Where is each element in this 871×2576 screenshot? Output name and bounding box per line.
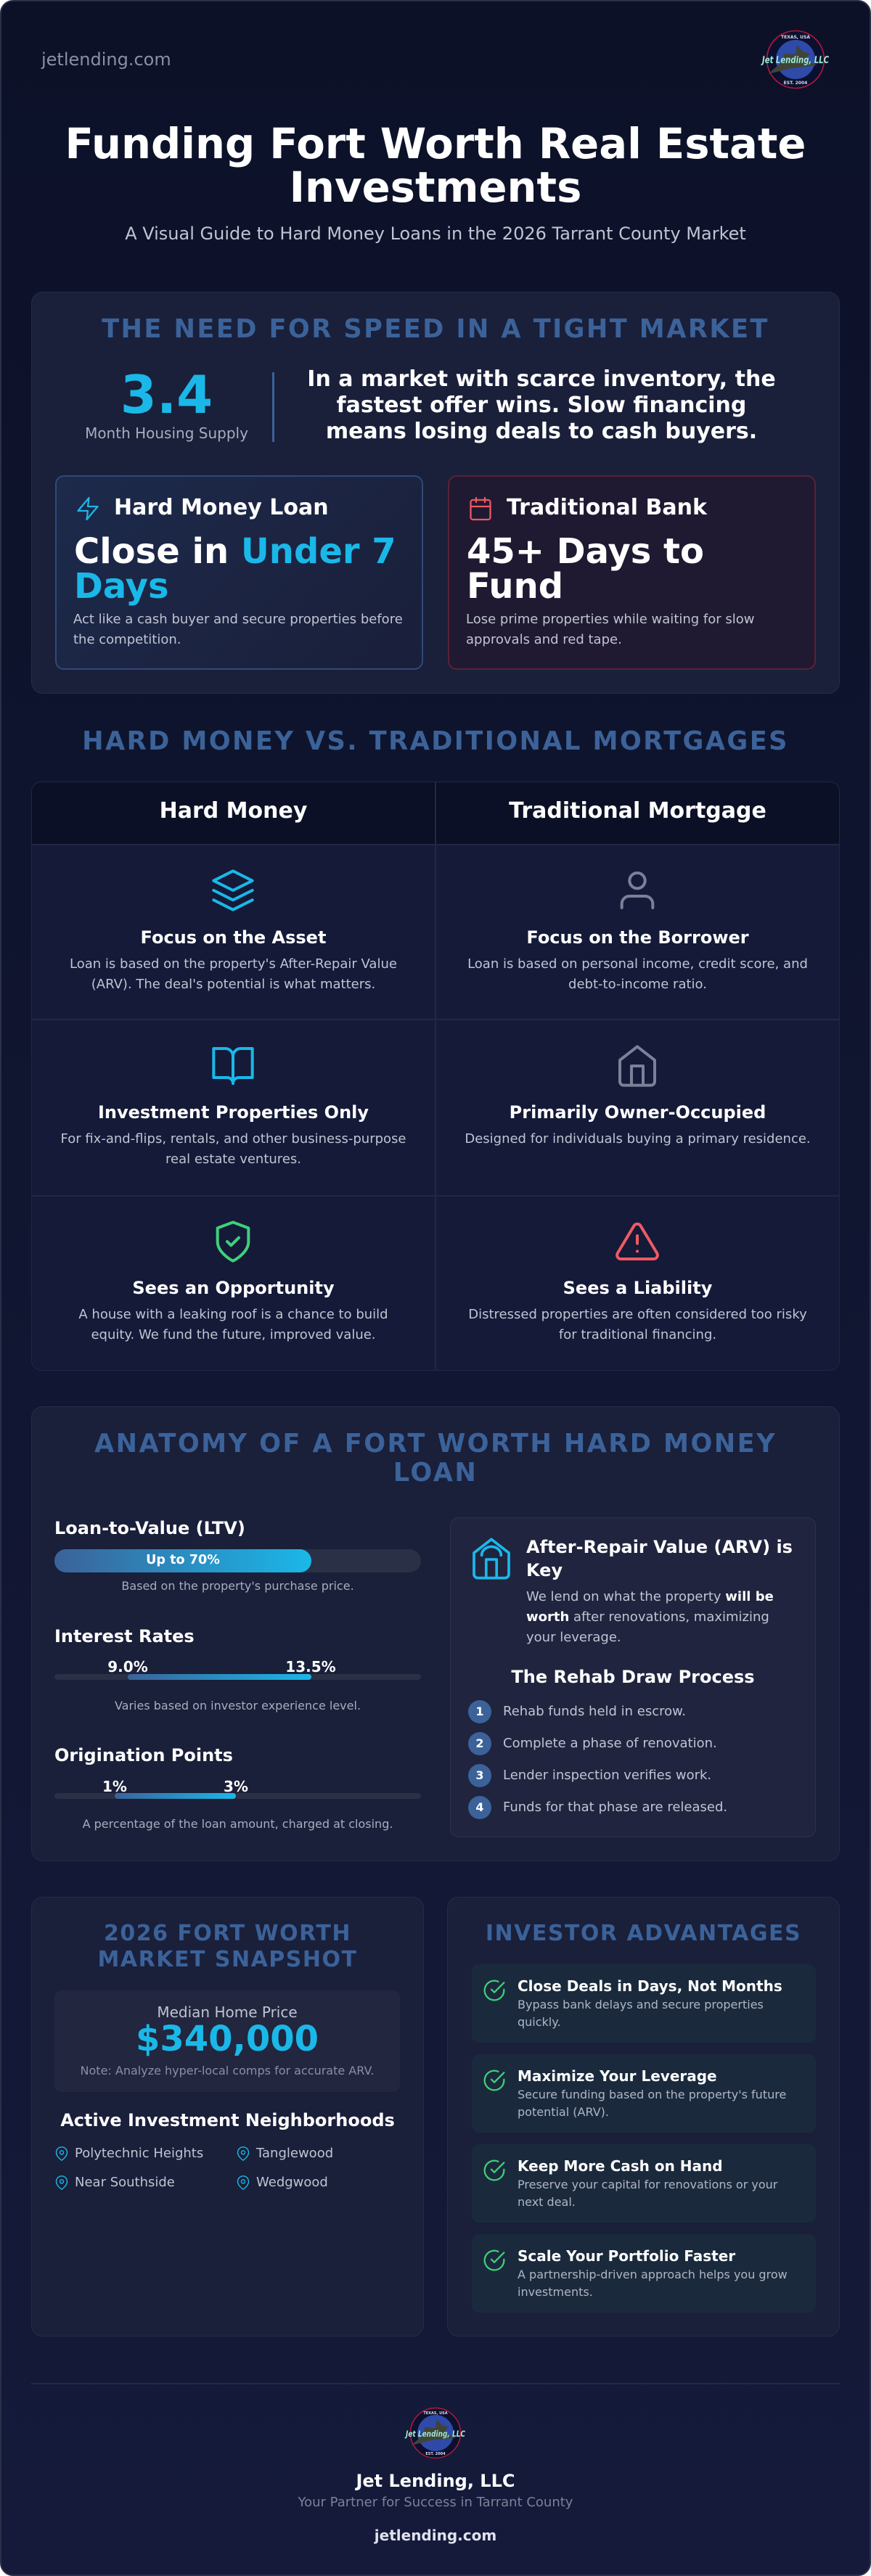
cell: focus on the asset: Focus on the Asset xyxy=(141,927,326,948)
site url: jetlending.com xyxy=(41,49,171,70)
step 4 xyxy=(468,1796,727,1819)
step 4: 4 xyxy=(475,1800,484,1814)
card value: close in under 7 days xyxy=(74,531,396,607)
metric: origination points: Origination Points xyxy=(54,1745,233,1765)
panel: need for speed xyxy=(31,292,840,694)
stat: median home price: $340,000 xyxy=(136,2019,319,2059)
metric: interest rates xyxy=(54,1626,421,1712)
card description: Act like a cash buyer and secure properties before xyxy=(73,612,403,627)
ARV description: worth after renovations, maximizing xyxy=(526,1609,769,1625)
logo: Jet Lending badge: TEXAS, USA xyxy=(781,35,810,40)
step 3 xyxy=(468,1764,711,1787)
card: traditional bank xyxy=(448,475,816,670)
ARV description: your leverage. xyxy=(526,1630,621,1645)
step 4: Funds for that phase are released. xyxy=(503,1800,727,1815)
icon: calendar xyxy=(470,496,491,521)
cell: sees an opportunity: Sees an Opportunity xyxy=(132,1278,335,1298)
comparison table xyxy=(31,782,840,1371)
cell: investment properties only: real estate ventures. xyxy=(165,1152,301,1167)
logo: Jet Lending badge xyxy=(761,30,829,89)
advantage 4 xyxy=(472,2234,816,2313)
metric: loan-to-value xyxy=(54,1518,421,1593)
neighborhood: Polytechnic Heights: Polytechnic Heights xyxy=(75,2146,203,2161)
cell: primarily owner-occupied: Primarily Owner-Occupied xyxy=(510,1102,766,1123)
stat: housing supply: Month Housing Supply xyxy=(85,424,248,442)
stat: median home price: Note: Analyze hyper-local comps for accurate ARV. xyxy=(81,2064,374,2077)
cell: sees a liability: Sees a Liability xyxy=(563,1278,712,1298)
icon: lightning bolt xyxy=(77,496,99,521)
step 2: 2 xyxy=(475,1736,484,1750)
cell: focus on the borrower: Focus on the Borrower xyxy=(526,927,749,948)
stat: housing supply xyxy=(85,364,248,442)
icon: house xyxy=(618,1045,656,1087)
step 2: Complete a phase of renovation. xyxy=(503,1736,717,1751)
ARV title: After-Repair Value (ARV) is xyxy=(526,1537,793,1557)
title xyxy=(65,120,806,212)
icon: open book xyxy=(212,1047,254,1085)
statement: In a market with scarce inventory, the xyxy=(307,366,776,392)
stat: median home price xyxy=(54,1990,400,2092)
cell: investment properties only xyxy=(60,1047,406,1167)
metric: origination points: 1% xyxy=(102,1778,127,1795)
card description xyxy=(466,612,755,647)
rehab draw heading: The Rehab Draw Process xyxy=(511,1667,755,1687)
step 2 xyxy=(468,1732,717,1755)
advantage 4: Scale Your Portfolio Faster xyxy=(518,2247,735,2265)
cell: sees an opportunity: A house with a leaking roof is a chance to build xyxy=(78,1307,388,1322)
cell: focus on the borrower: debt-to-income ratio. xyxy=(568,977,707,992)
footer logo xyxy=(404,2408,465,2458)
advantage 3: next deal. xyxy=(518,2195,576,2209)
icon: warning triangle xyxy=(616,1222,659,1260)
metric: interest rates: 9.0% xyxy=(107,1658,148,1675)
icon: ARV house xyxy=(473,1538,510,1579)
metric: loan-to-value: Based on the property's purchase price. xyxy=(121,1579,354,1593)
footer url: jetlending.com xyxy=(375,2527,496,2544)
card value: 45+ days to fund: Fund xyxy=(467,566,563,607)
card title: traditional bank: Traditional Bank xyxy=(507,495,707,520)
metric: interest rates: 13.5% xyxy=(285,1658,336,1675)
cell: focus on the asset: Loan is based on the property's After-Repair Value xyxy=(70,956,397,972)
title: Investments xyxy=(290,163,581,212)
icon: user xyxy=(620,871,655,909)
ARV title xyxy=(526,1537,793,1580)
advantage 2 xyxy=(472,2054,816,2133)
ARV title: Key xyxy=(526,1560,563,1580)
neighborhood: Tanglewood: Tanglewood xyxy=(256,2146,333,2161)
advantage 3: Keep More Cash on Hand xyxy=(518,2157,723,2175)
card description: Lose prime properties while waiting for slow xyxy=(466,612,755,627)
neighborhood: Wedgwood: Wedgwood xyxy=(256,2175,328,2190)
metric: loan-to-value: Up to 70% xyxy=(146,1553,220,1567)
step 3: 3 xyxy=(475,1768,484,1782)
cell: sees a liability xyxy=(468,1222,807,1342)
stat: housing supply: 3.4 xyxy=(120,364,213,425)
ARV description xyxy=(526,1589,774,1645)
card description: the competition. xyxy=(73,632,181,647)
card value: close in under 7 days: Close in Under 7 xyxy=(74,531,396,572)
metric: interest rates: Varies based on investor experience level. xyxy=(115,1699,361,1712)
card value: 45+ days to fund: 45+ Days to xyxy=(467,531,704,572)
advantage 2: Maximize Your Leverage xyxy=(518,2067,717,2085)
footer company name: Jet Lending, LLC xyxy=(356,2471,515,2491)
advantage 3 xyxy=(472,2144,816,2223)
panel: ARV and rehab draw xyxy=(450,1517,816,1837)
step 1 xyxy=(468,1700,686,1723)
card: hard money loan xyxy=(55,475,423,670)
step 1: Rehab funds held in escrow. xyxy=(503,1704,686,1719)
card description: approvals and red tape. xyxy=(466,632,622,647)
statement: means losing deals to cash buyers. xyxy=(326,419,757,444)
cell: focus on the asset xyxy=(70,869,397,992)
icon: shield check xyxy=(216,1221,250,1263)
cell: investment properties only: Investment Properties Only xyxy=(98,1102,369,1123)
panel: anatomy of a loan xyxy=(31,1406,840,1861)
table header: hard money: Hard Money xyxy=(160,798,307,824)
panel: market snapshot xyxy=(31,1897,424,2337)
advantage 2: potential (ARV). xyxy=(518,2105,609,2119)
heading: investor advantages: INVESTOR ADVANTAGES xyxy=(486,1921,801,1946)
advantage 1 xyxy=(472,1964,816,2043)
cell: sees a liability: Distressed properties are often considered too risky xyxy=(468,1307,807,1322)
cell: primarily owner-occupied: Designed for individuals buying a primary residence. xyxy=(465,1131,811,1147)
heading: market snapshot xyxy=(98,1921,357,1972)
advantage 4: A partnership-driven approach helps you grow xyxy=(518,2268,788,2281)
metric: interest rates: Interest Rates xyxy=(54,1626,195,1646)
heading: anatomy: LOAN xyxy=(393,1458,478,1488)
metric: origination points: A percentage of the loan amount, charged at closing. xyxy=(83,1817,393,1831)
cell: focus on the asset: (ARV). The deal's potential is what matters. xyxy=(91,977,375,992)
cell: investment properties only: For fix-and-flips, rentals, and other business-purpose xyxy=(60,1131,406,1147)
heading: market snapshot: MARKET SNAPSHOT xyxy=(98,1947,357,1972)
step 3: Lender inspection verifies work. xyxy=(503,1768,711,1783)
statement xyxy=(307,366,776,444)
panel: investor advantages xyxy=(447,1897,840,2337)
heading: anatomy xyxy=(94,1429,777,1488)
subtitle: A Visual Guide to Hard Money Loans in the 2026 Tarrant County Market xyxy=(125,223,746,244)
card title: hard money loan: Hard Money Loan xyxy=(114,495,329,520)
card description xyxy=(73,612,403,647)
advantage 1: Close Deals in Days, Not Months xyxy=(518,1977,782,1995)
advantage 4: investments. xyxy=(518,2285,593,2299)
heading: market snapshot: 2026 FORT WORTH xyxy=(104,1921,351,1946)
cell: sees an opportunity xyxy=(78,1221,388,1342)
advantage 1: quickly. xyxy=(518,2015,561,2029)
advantage 1: Bypass bank delays and secure properties xyxy=(518,1998,764,2011)
card value: close in under 7 days: Days xyxy=(74,566,169,607)
metric: loan-to-value: Loan-to-Value (LTV) xyxy=(54,1518,245,1538)
card value: 45+ days to fund xyxy=(467,531,704,607)
heading: need for speed: THE NEED FOR SPEED IN A TIGHT MARKET xyxy=(102,314,769,344)
icon: layers xyxy=(212,869,254,911)
step 1: 1 xyxy=(475,1705,484,1718)
metric: origination points: 3% xyxy=(224,1778,248,1795)
neighborhood: Near Southside: Near Southside xyxy=(75,2175,175,2190)
footer logo: EST. 2004 xyxy=(425,2452,446,2456)
cell: focus on the borrower xyxy=(467,871,808,992)
ARV description: We lend on what the property will be xyxy=(526,1589,774,1604)
title: Funding Fort Worth Real Estate xyxy=(65,120,806,168)
footer tagline: Your Partner for Success in Tarrant County xyxy=(298,2495,573,2510)
divider xyxy=(272,372,274,442)
cell: focus on the borrower: Loan is based on personal income, credit score, and xyxy=(467,956,808,972)
heading: anatomy: ANATOMY OF A FORT WORTH HARD MONEY xyxy=(94,1429,777,1459)
metric: origination points xyxy=(54,1745,421,1831)
cell: sees a liability: for traditional financing. xyxy=(559,1327,716,1342)
stat: median home price: Median Home Price xyxy=(157,2003,298,2021)
statement: fastest offer wins. Slow financing xyxy=(337,393,746,418)
table header: traditional mortgage: Traditional Mortgage xyxy=(509,798,766,824)
neighborhoods heading: Active Investment Neighborhoods xyxy=(60,2110,395,2130)
cell: sees an opportunity: equity. We fund the future, improved value. xyxy=(91,1327,376,1342)
heading: comparison: HARD MONEY VS. TRADITIONAL MORTGAGES xyxy=(82,726,789,756)
cell: primarily owner-occupied xyxy=(465,1045,811,1147)
footer logo: TEXAS, USA xyxy=(423,2411,448,2416)
advantage 3: Preserve your capital for renovations or your xyxy=(518,2178,777,2191)
logo: Jet Lending badge: EST. 2004 xyxy=(784,81,807,86)
advantage 2: Secure funding based on the property's future xyxy=(518,2088,786,2101)
